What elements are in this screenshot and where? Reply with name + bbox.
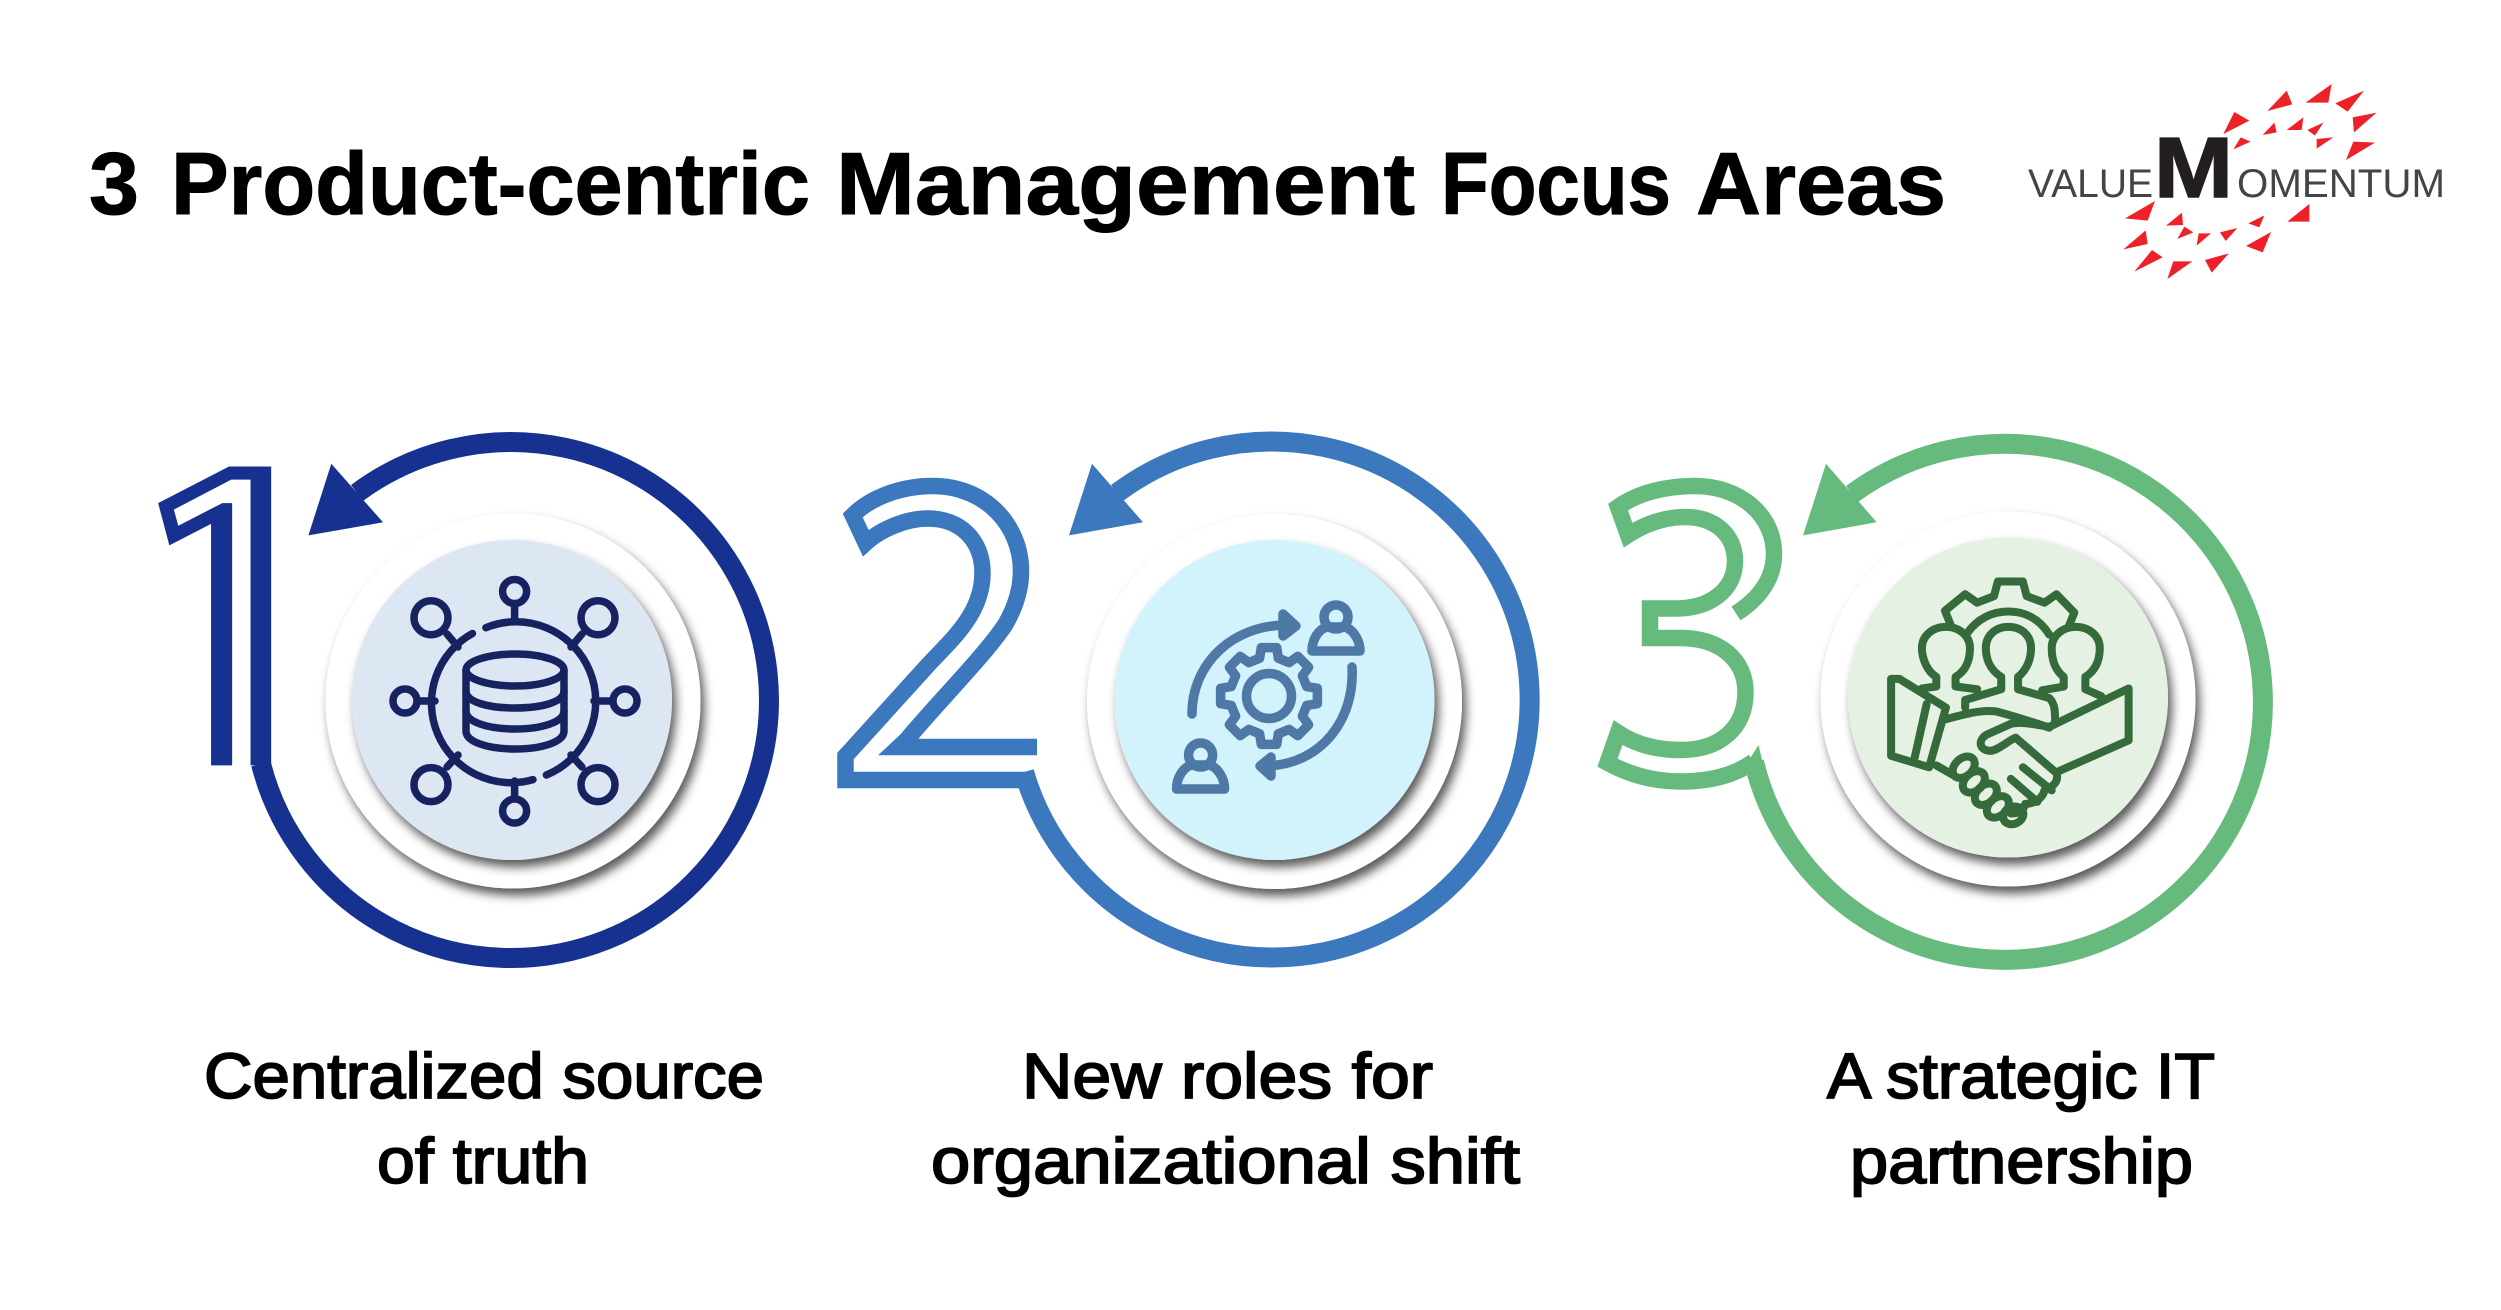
number 1 outline [158, 467, 271, 765]
title: 3 [89, 134, 139, 233]
arrowhead 3 [1803, 464, 1877, 535]
title [89, 134, 1946, 233]
arrowhead 2 [1069, 464, 1143, 535]
label 3: A strategic IT [1827, 1040, 2215, 1112]
label 3 [1827, 1040, 2215, 1197]
title: Management [836, 134, 1415, 233]
rotation arrows [1192, 625, 1287, 714]
logo wordmark: OMENTUM [2237, 162, 2445, 206]
label 1: of truth [377, 1125, 589, 1197]
panel: focus area 1 [158, 442, 769, 1197]
panel: focus area 2 [846, 442, 1530, 1197]
icon: database network [393, 580, 637, 823]
inner tinted circle 1 [352, 540, 672, 860]
person bottom left [1177, 743, 1225, 789]
logo wordmark [2028, 121, 2445, 216]
arrowhead 1 [308, 464, 383, 535]
title: Areas [1696, 134, 1946, 233]
icon: team handshake with gear [1891, 582, 2129, 827]
label 2: organizational shift [931, 1125, 1520, 1197]
label 1 [204, 1040, 764, 1197]
number 2 outline [846, 486, 1037, 780]
gear [1221, 648, 1317, 744]
person top right [1312, 605, 1360, 651]
title: Product-centric [171, 134, 810, 233]
icon: gear, arrows and people [1177, 605, 1360, 789]
title: Focus [1441, 134, 1671, 233]
outer white circle 3 [1820, 512, 2196, 886]
outer white circle 2 [1087, 514, 1462, 889]
label 2: New roles for [1022, 1040, 1433, 1112]
logo: ValueMomentum [2028, 84, 2445, 279]
number 3 outline [1608, 486, 1774, 782]
panel: focus area 3 [1608, 444, 2263, 1197]
label 2 [931, 1040, 1520, 1197]
tip joining number 3 and arrow line [1744, 745, 1764, 768]
circular arrow line 3 [1754, 444, 2263, 960]
label 1: Centralized source [204, 1040, 764, 1112]
circular arrow line 2 [1024, 442, 1530, 958]
inner tinted circle 2 [1114, 540, 1434, 860]
inner tinted circle 3 [1848, 538, 2168, 858]
circular arrow line 1 [261, 442, 769, 958]
label 3: partnership [1850, 1125, 2193, 1197]
logo wordmark: VALUE [2028, 162, 2153, 206]
logo red triangles [2123, 84, 2377, 279]
outer white circle 1 [326, 514, 700, 888]
logo wordmark: M [2154, 121, 2233, 216]
